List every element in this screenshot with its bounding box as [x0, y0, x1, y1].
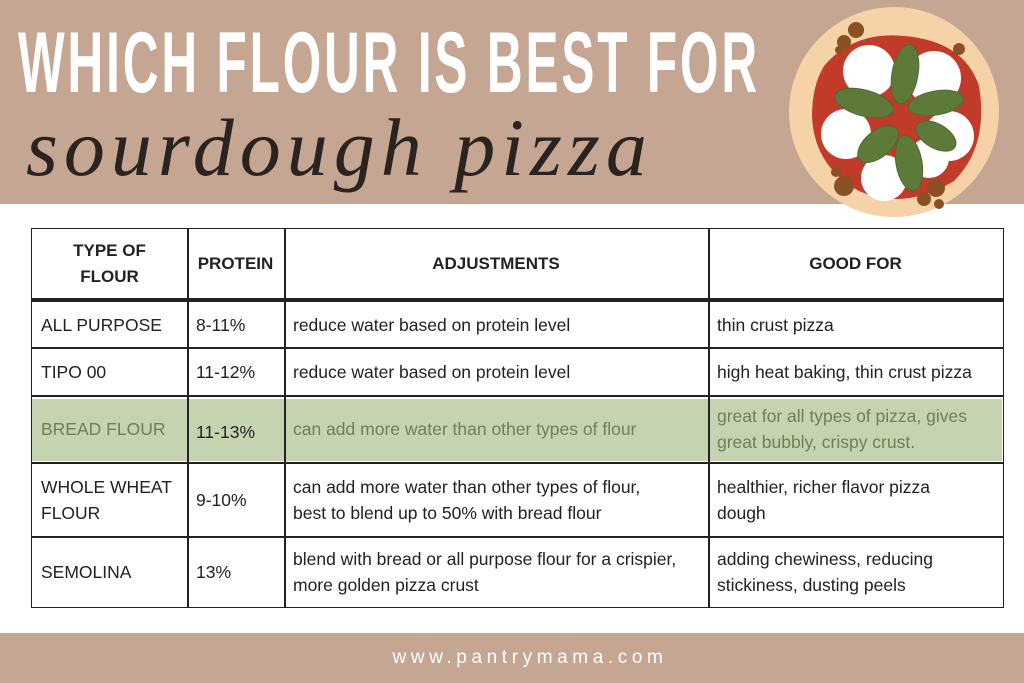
- table: 13%: [196, 562, 231, 582]
- table: reduce water based on protein level: [293, 362, 570, 382]
- icon: pizza: [789, 7, 999, 217]
- table: 11-13%: [196, 422, 255, 442]
- table: reduce water based on protein level: [293, 314, 570, 334]
- table: GOOD FOR: [809, 254, 902, 273]
- footer: [0, 633, 1024, 683]
- row: all purpose: ALL PURPOSE: [41, 314, 162, 334]
- row: tipo 00: TIPO 00: [41, 362, 106, 382]
- table: ADJUSTMENTS: [432, 254, 560, 273]
- table: great for all types of pizza, gives great bubbly, crispy crust.: [717, 406, 967, 452]
- row: whole wheat: WHOLE WHEAT FLOUR: [41, 476, 172, 522]
- table: best to blend up to 50% with bread flour: [293, 502, 601, 522]
- table: healthier, richer flavor pizza dough: [717, 476, 930, 522]
- highlight row: bread flour: [32, 399, 1002, 461]
- script subtitle: sourdough pizza: [26, 102, 653, 193]
- header row: [73, 241, 146, 286]
- table: thin crust pizza: [717, 314, 834, 334]
- table: 11-12%: [196, 362, 255, 382]
- table: can add more water than other types of flour,: [293, 476, 640, 496]
- header row: FLOUR: [80, 267, 139, 286]
- table: blend with bread or all purpose flour for a crispier, more golden pizza crust: [293, 549, 676, 595]
- table: high heat baking, thin crust pizza: [717, 362, 972, 382]
- table: adding chewiness, reducing stickiness, dusting peels: [717, 549, 933, 595]
- table: PROTEIN: [198, 254, 273, 273]
- table: [31, 228, 1004, 608]
- title: WHICH FLOUR IS BEST FOR: [18, 15, 760, 111]
- table: can add more water than other types of flour: [293, 419, 636, 439]
- header band: [0, 0, 1024, 204]
- footer: www.pantrymama.com: [393, 647, 667, 668]
- table: 8-11%: [196, 314, 245, 334]
- row: semolina: SEMOLINA: [41, 562, 131, 582]
- row: bread flour: BREAD FLOUR: [41, 419, 165, 439]
- header row: TYPE OF: [73, 241, 146, 260]
- table: 9-10%: [196, 490, 247, 510]
